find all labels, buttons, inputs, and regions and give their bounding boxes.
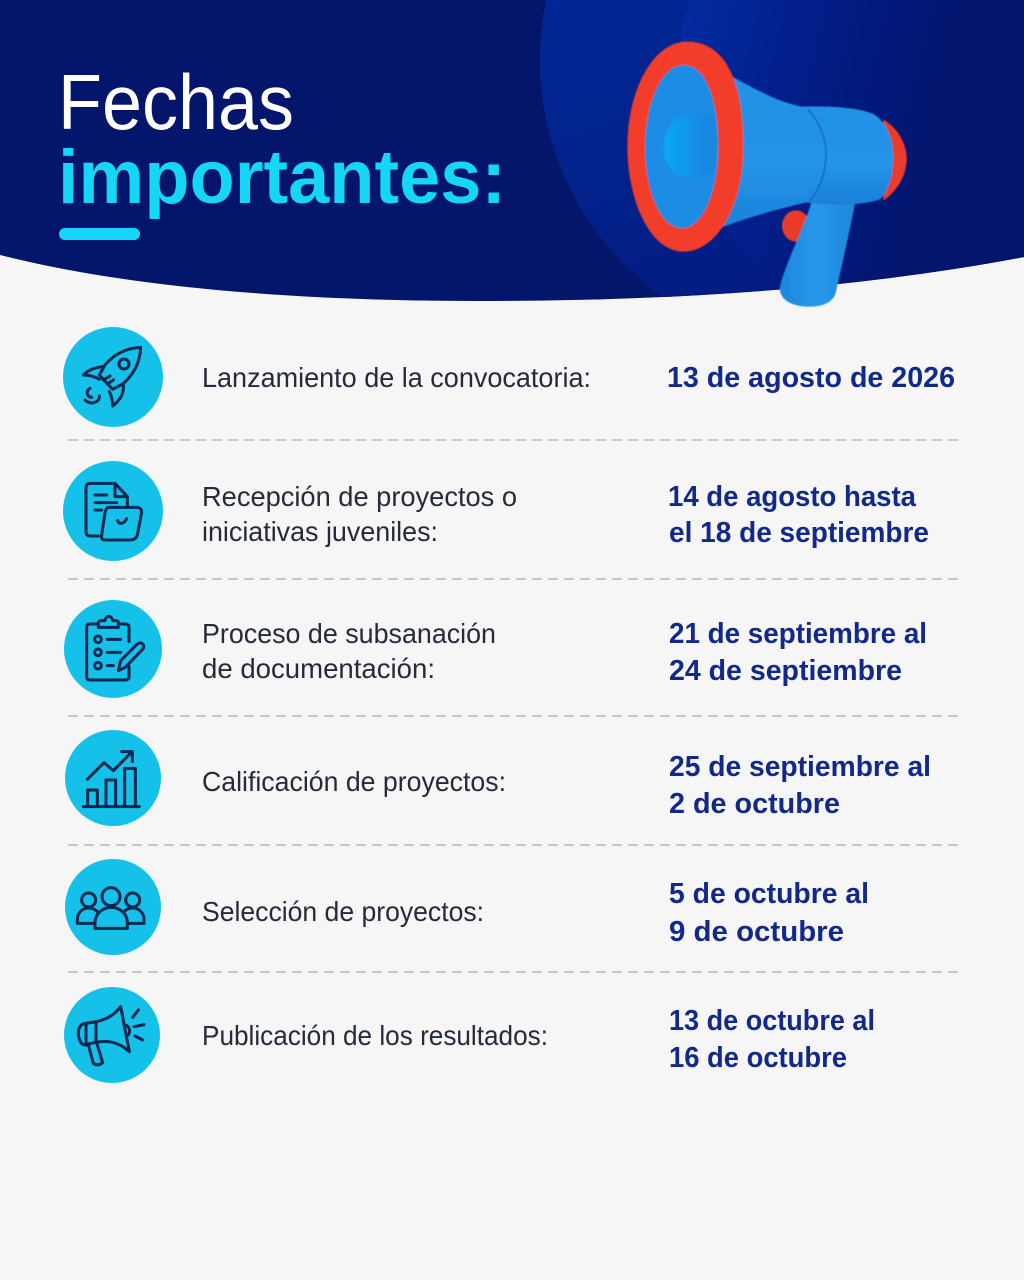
label: Recepción de proyectos o (202, 481, 517, 512)
date: 25 de septiembre al (669, 751, 931, 783)
date: 24 de septiembre (669, 655, 902, 687)
label (202, 481, 517, 547)
date: 9 de octubre (669, 916, 844, 948)
date: 14 de agosto hasta (668, 481, 917, 513)
title: importantes: (58, 135, 506, 220)
row: publicación (64, 987, 875, 1083)
row: recepción (63, 461, 929, 561)
date (669, 751, 931, 820)
label: Calificación de proyectos: (202, 766, 506, 797)
header banner (0, 0, 1024, 301)
label: de documentación: (202, 653, 435, 684)
icon: megaphone (64, 987, 160, 1083)
row: selección (65, 859, 869, 955)
label: Proceso de subsanación (202, 618, 496, 649)
row: lanzamiento (63, 327, 955, 427)
icon: documents (63, 461, 163, 561)
icon: rocket (63, 327, 163, 427)
date: 16 de octubre (669, 1042, 847, 1074)
label (202, 618, 496, 684)
date (669, 878, 869, 948)
row: calificación (65, 730, 931, 826)
icon: bar chart (65, 730, 161, 826)
row: subsanación (64, 600, 927, 698)
label: iniciativas juveniles: (202, 516, 438, 547)
date: 2 de octubre (669, 788, 840, 820)
date (669, 1005, 875, 1074)
label: Publicación de los resultados: (202, 1020, 548, 1051)
label: Selección de proyectos: (202, 896, 484, 927)
icon: people (65, 859, 161, 955)
icon: 3D megaphone (627, 42, 907, 307)
title (58, 58, 506, 220)
date: 13 de octubre al (669, 1005, 875, 1037)
title underline (59, 228, 140, 240)
date: 13 de agosto de 2026 (667, 362, 955, 394)
date: 21 de septiembre al (669, 618, 927, 650)
label: Lanzamiento de la convocatoria: (202, 362, 591, 393)
date (669, 618, 927, 687)
icon: clipboard (64, 600, 162, 698)
date: 5 de octubre al (669, 878, 869, 910)
date: el 18 de septiembre (669, 517, 929, 549)
date (668, 481, 929, 549)
title: Fechas (58, 58, 294, 146)
